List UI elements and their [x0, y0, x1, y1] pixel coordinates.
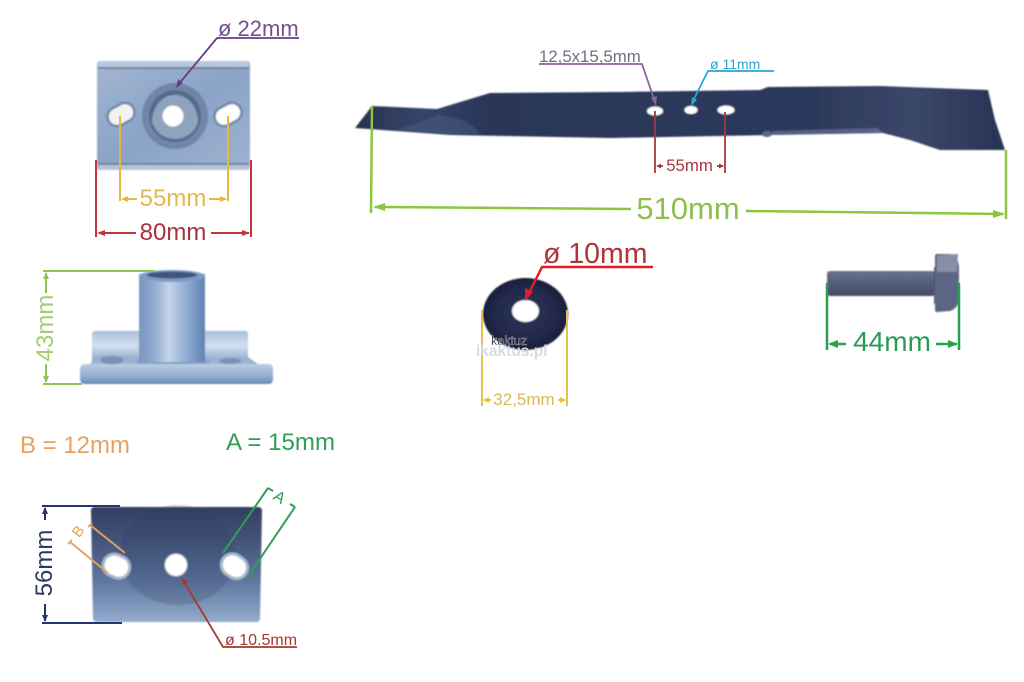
label: 11mm hole: ø 11mm: [710, 56, 760, 72]
arrow: 10.5mm centre hole: [181, 576, 297, 647]
dimension: 80mm plate width: 80mm: [140, 219, 206, 246]
arrow: 22mm bore: [176, 38, 299, 88]
dimension: 510mm blade length: 510mm: [636, 191, 740, 226]
panel: washer: [476, 238, 653, 409]
dimension: 55mm hole spacing: [655, 111, 725, 175]
panel: mower blade: [355, 47, 1006, 226]
label: 10mm bore: ø 10mm: [543, 238, 648, 270]
washer body: [483, 278, 568, 350]
panel: side view of mounting plate: [32, 270, 273, 384]
dimension: 32.5mm diameter: 32,5mm: [493, 390, 555, 409]
dimension: A slot length: [223, 488, 295, 578]
label: B = 12mm: B = 12mm: [20, 432, 130, 459]
arrow: 12.5x15.5mm slot: [539, 64, 657, 106]
arrow: 11mm hole: [691, 71, 774, 106]
dimension: 55mm slot spacing: [120, 116, 228, 212]
dimension: 510mm blade length: [371, 106, 1006, 226]
panel: top view of mounting plate: [96, 16, 299, 246]
blade body: [355, 86, 1005, 150]
dimension: 43mm height: [32, 271, 155, 384]
dimension: 55mm hole spacing: 55mm: [666, 156, 713, 175]
dimension: A slot length: A: [270, 488, 289, 508]
label: 10.5mm hole: ø 10.5mm: [225, 632, 297, 649]
side view part: [80, 270, 273, 384]
dimension: 43mm height: 43mm: [32, 295, 59, 361]
panel: underside of mounting plate: [31, 488, 297, 649]
arrow: 10mm bore: [525, 267, 653, 301]
plate body: [97, 61, 250, 170]
dimension: 32.5mm diameter: [482, 310, 567, 409]
watermark: kaktus: kaktuz: [491, 334, 527, 348]
watermark: ikaktus.pl: ikaktus.pl: [476, 343, 548, 360]
dimension: 44mm bolt length: 44mm: [853, 326, 931, 357]
underside plate: [91, 505, 262, 622]
label: 22mm bore: ø 22mm: [218, 16, 299, 41]
dimension: B slot width: [68, 522, 125, 573]
dimension: 56mm plate depth: [31, 506, 122, 623]
panel: bolt: [827, 254, 959, 357]
label: slot size: 12,5x15,5mm: [539, 47, 641, 66]
dimension: B slot width: B: [69, 522, 88, 541]
dimension: 55mm slot spacing: 55mm: [140, 185, 206, 212]
bolt body: [827, 254, 959, 312]
dimension: 80mm plate width: [96, 160, 251, 246]
label: A = 15mm: A = 15mm: [226, 429, 335, 456]
dimension: 56mm plate depth: 56mm: [31, 530, 58, 596]
